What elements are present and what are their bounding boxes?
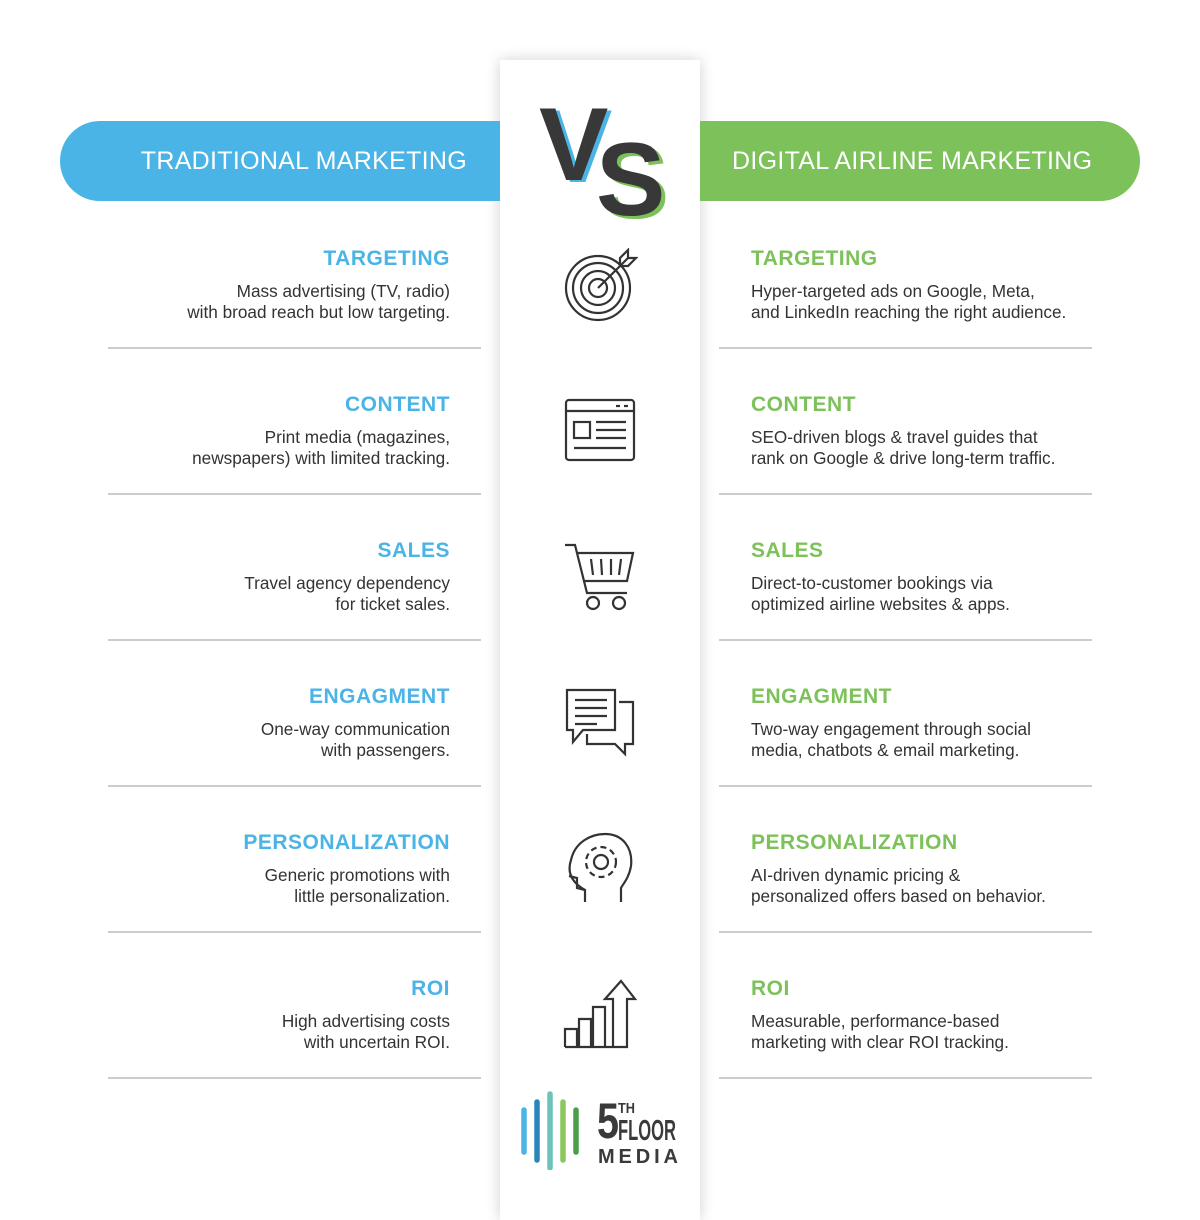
row: engagement left (261, 685, 450, 760)
row: roi left (282, 977, 450, 1052)
icon: content (564, 398, 636, 462)
icon: chat (566, 688, 634, 756)
row: personalization left: Generic promotions with (265, 865, 450, 885)
row: targeting right: TARGETING (751, 247, 878, 270)
row: personalization right: personalized offers based on behavior. (751, 886, 1046, 906)
row: content right: SEO-driven blogs & travel guides that (751, 427, 1038, 447)
row: roi right: Measurable, performance-based (751, 1011, 999, 1031)
row: targeting left (187, 247, 450, 322)
row: sales right: SALES (751, 539, 824, 562)
row: roi right (751, 977, 1009, 1052)
row: content right (751, 393, 1055, 468)
row: roi left: with uncertain ROI. (304, 1032, 450, 1052)
row: sales left: SALES (377, 539, 450, 562)
row: targeting right: Hyper-targeted ads on Google, Meta, (751, 281, 1035, 301)
row: sales right: optimized airline websites & apps. (751, 594, 1010, 614)
banner: traditional marketing (60, 121, 500, 201)
logo: 5th floor media: TH (618, 1100, 635, 1117)
VS logo: V (539, 90, 608, 203)
icon: target (564, 248, 638, 322)
VS logo: V (543, 90, 612, 205)
icon: ROI chart (564, 979, 637, 1048)
row: content left: Print media (magazines, (265, 427, 450, 447)
row: targeting right (751, 247, 1066, 322)
row: content left (192, 393, 450, 468)
row: sales right: Direct-to-customer bookings via (751, 573, 993, 593)
row: roi right: marketing with clear ROI tracking. (751, 1032, 1009, 1052)
logo: 5th floor media (521, 1091, 678, 1170)
row: roi left: ROI (411, 977, 450, 1000)
center strip (500, 60, 700, 1220)
row: personalization right: AI-driven dynamic pricing & (751, 865, 960, 885)
row: sales right (751, 539, 1010, 614)
row: targeting left: with broad reach but low targeting. (187, 302, 450, 322)
row: targeting left: TARGETING (323, 247, 450, 270)
row: engagement right: Two-way engagement through social (751, 719, 1031, 739)
row: personalization left: little personalization. (294, 886, 450, 906)
row: engagement left: ENGAGMENT (309, 685, 450, 708)
row: engagement right: media, chatbots & email marketing. (751, 740, 1019, 760)
row: sales left (244, 539, 450, 614)
row: targeting left: Mass advertising (TV, radio) (237, 281, 450, 301)
row: targeting right: and LinkedIn reaching the right audience. (751, 302, 1066, 322)
row: sales left: Travel agency dependency (244, 573, 450, 593)
row: personalization right (751, 831, 1046, 906)
icon: head gear (568, 832, 632, 902)
row: engagement left: with passengers. (321, 740, 450, 760)
logo: 5th floor media: 5 (597, 1093, 619, 1149)
row: engagement right (751, 685, 1031, 760)
row: personalization left: PERSONALIZATION (243, 831, 450, 854)
icon: cart (565, 544, 634, 610)
row: personalization right: PERSONALIZATION (751, 831, 958, 854)
row: content left: newspapers) with limited tracking. (192, 448, 450, 468)
banner: digital airline marketing (700, 121, 1140, 201)
row: personalization left (243, 831, 450, 906)
VS logo (539, 90, 669, 220)
row: engagement right: ENGAGMENT (751, 685, 892, 708)
row: roi right: ROI (751, 977, 790, 1000)
row: content right: CONTENT (751, 393, 856, 416)
row: content left: CONTENT (345, 393, 450, 416)
banner: traditional marketing: TRADITIONAL MARKETING (141, 147, 467, 175)
row: sales left: for ticket sales. (335, 594, 450, 614)
logo: 5th floor media: MEDIA (598, 1146, 678, 1168)
row: roi left: High advertising costs (282, 1011, 450, 1031)
banner: digital airline marketing: DIGITAL AIRLINE MARKETING (732, 147, 1092, 175)
row: engagement left: One-way communication (261, 719, 450, 739)
row: content right: rank on Google & drive long-term traffic. (751, 448, 1055, 468)
